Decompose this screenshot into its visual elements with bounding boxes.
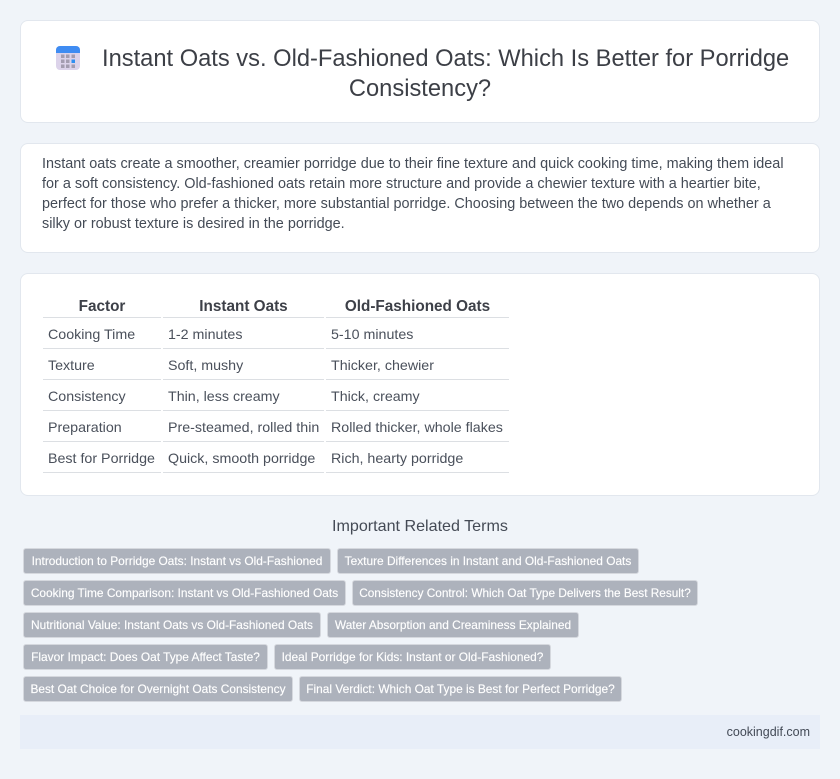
- comparison table: Quick, smooth porridge: [168, 451, 315, 467]
- comparison table: 1-2 minutes: [168, 327, 242, 343]
- comparison table: Instant Oats: [199, 298, 288, 315]
- comparison table: Old-Fashioned Oats: [345, 298, 490, 315]
- comparison table: Thick, creamy: [331, 389, 420, 405]
- comparison table: Rich, hearty porridge: [331, 451, 463, 467]
- comparison table: Rolled thicker, whole flakes: [331, 420, 503, 436]
- related term tags: Water Absorption and Creaminess Explained: [335, 618, 571, 632]
- title: [102, 46, 789, 102]
- related term tags: Flavor Impact: Does Oat Type Affect Taste?: [31, 650, 260, 664]
- icon: calendar: [56, 46, 80, 70]
- footer: [20, 715, 820, 749]
- comparison table: Soft, mushy: [168, 358, 243, 374]
- comparison table: Consistency: [48, 389, 126, 405]
- panel: intro text: [20, 143, 820, 253]
- comparison table: [43, 298, 509, 473]
- related term tags: Best Oat Choice for Overnight Oats Consistency: [30, 682, 286, 696]
- comparison table: 5-10 minutes: [331, 327, 413, 343]
- related term tags: Final Verdict: Which Oat Type is Best for Perfect Porridge?: [306, 682, 615, 696]
- comparison table: Best for Porridge: [48, 451, 155, 467]
- panel: comparison table: [20, 273, 820, 496]
- panel: title header: [20, 20, 820, 123]
- related term tags: Cooking Time Comparison: Instant vs Old-Fashioned Oats: [31, 586, 338, 600]
- text block: introduction: [42, 156, 784, 232]
- text block: introduction: for a soft consistency. Old-fashioned oats retain more structure and provide a chewier texture with a heartier bite,: [42, 176, 761, 192]
- related term tags: Consistency Control: Which Oat Type Delivers the Best Result?: [359, 586, 691, 600]
- comparison table: Thin, less creamy: [168, 389, 280, 405]
- related term tags: Texture Differences in Instant and Old-Fashioned Oats: [345, 554, 631, 568]
- comparison table: Pre-steamed, rolled thin: [168, 420, 319, 436]
- comparison table: Preparation: [48, 420, 122, 436]
- related term tags: Nutritional Value: Instant Oats vs Old-Fashioned Oats: [31, 618, 313, 632]
- title: Consistency?: [349, 76, 491, 102]
- heading: related terms: Important Related Terms: [332, 517, 508, 535]
- comparison table: Thicker, chewier: [331, 358, 434, 374]
- text block: introduction: perfect for those who prefer a thicker, more substantial porridge. Choosing between the two depends on whether a: [42, 196, 771, 212]
- comparison table: Factor: [79, 298, 125, 315]
- footer source text: cookingdif.com: [727, 725, 810, 739]
- title: Instant Oats vs. Old-Fashioned Oats: Which Is Better for Porridge: [102, 46, 789, 72]
- comparison table: Texture: [48, 358, 95, 374]
- text block: introduction: silky or robust texture is desired in the porridge.: [42, 216, 345, 232]
- related term tags: [23, 548, 698, 702]
- comparison table: Cooking Time: [48, 327, 135, 343]
- text block: introduction: Instant oats create a smoother, creamier porridge due to their fine texture and quick cooking time, making them ideal: [42, 156, 784, 172]
- related term tags: Ideal Porridge for Kids: Instant or Old-Fashioned?: [282, 650, 543, 664]
- related term tags: Introduction to Porridge Oats: Instant vs Old-Fashioned: [32, 554, 322, 568]
